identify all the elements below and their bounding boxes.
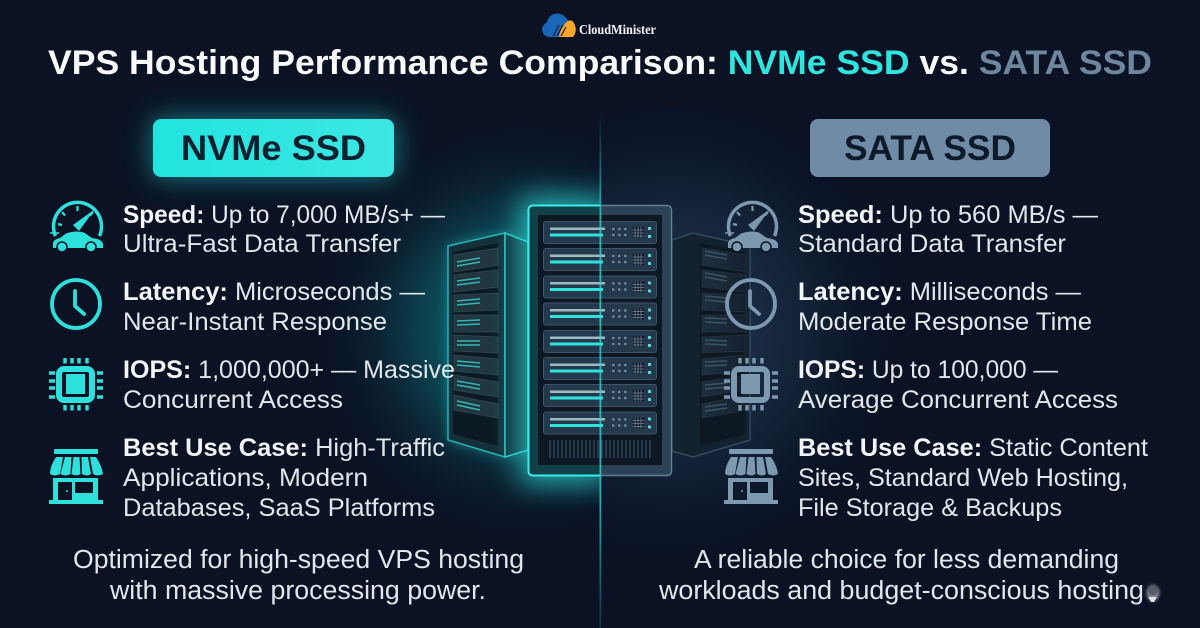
IOPS text: Average Concurrent Access bbox=[798, 386, 1118, 414]
SATA summary: A reliable choice for less demanding bbox=[694, 546, 1119, 574]
SATA summary bbox=[658, 546, 1144, 605]
icon: chip bbox=[724, 358, 778, 410]
right rear rack bbox=[672, 233, 750, 457]
logo icon bbox=[542, 14, 576, 37]
latency text: Near-Instant Response bbox=[123, 308, 387, 336]
latency text: Moderate Response Time bbox=[798, 308, 1092, 336]
title: VPS Hosting Performance Comparison: NVMe SSD vs. SATA SSD bbox=[48, 44, 1152, 82]
SATA summary: workloads and budget-conscious hosting bbox=[658, 577, 1144, 605]
server illustration bbox=[448, 197, 750, 484]
best use case text: Sites, Standard Web Hosting, bbox=[798, 464, 1128, 492]
SATA badge bbox=[810, 119, 1050, 177]
best use case text: Applications, Modern bbox=[123, 464, 368, 492]
latency text: Latency: Microseconds — bbox=[123, 278, 425, 306]
icon: speedometer and car bbox=[725, 202, 778, 252]
watermark smudge bbox=[1146, 585, 1160, 602]
NVMe badge bbox=[153, 119, 394, 177]
rack vent bbox=[550, 440, 650, 458]
best use case text bbox=[123, 434, 445, 522]
icon: clock bbox=[52, 280, 100, 328]
best use case text bbox=[798, 434, 1148, 522]
icon: storefront bbox=[49, 449, 103, 504]
speed text bbox=[123, 201, 445, 258]
IOPS text: IOPS: Up to 100,000 — bbox=[798, 356, 1058, 384]
NVMe summary bbox=[73, 546, 524, 605]
best use case text: Best Use Case: High-Traffic bbox=[123, 434, 445, 462]
latency text bbox=[798, 278, 1092, 336]
IOPS text: IOPS: 1,000,000+ — Massive bbox=[123, 356, 455, 384]
speed text: Speed: Up to 560 MB/s — bbox=[798, 201, 1098, 229]
NVMe summary: with massive processing power. bbox=[109, 577, 486, 605]
best use case text: File Storage & Backups bbox=[798, 494, 1062, 522]
latency text: Latency: Milliseconds — bbox=[798, 278, 1081, 306]
panel: SATA SSD bbox=[658, 119, 1160, 605]
latency text bbox=[123, 278, 425, 336]
central rack bbox=[528, 206, 672, 476]
icon: speedometer and car bbox=[50, 202, 103, 252]
panel: NVMe SSD bbox=[49, 119, 524, 605]
icon: chip bbox=[49, 358, 103, 410]
rack units bbox=[544, 222, 656, 434]
IOPS text: Concurrent Access bbox=[123, 386, 343, 414]
icon: storefront bbox=[724, 449, 778, 504]
NVMe badge: NVMe SSD bbox=[181, 129, 366, 168]
divider line bbox=[600, 115, 601, 628]
NVMe summary: Optimized for high-speed VPS hosting bbox=[73, 546, 524, 574]
left rear rack bbox=[448, 233, 528, 457]
best use case text: Best Use Case: Static Content bbox=[798, 434, 1148, 462]
IOPS text bbox=[123, 356, 455, 414]
IOPS text bbox=[798, 356, 1118, 414]
logo wordmark: CloudMinister bbox=[579, 23, 656, 38]
SATA badge: SATA SSD bbox=[844, 129, 1016, 168]
central rack glow bbox=[520, 197, 610, 484]
icon: clock bbox=[727, 280, 775, 328]
speed text: Standard Data Transfer bbox=[798, 230, 1066, 258]
speed text: Speed: Up to 7,000 MB/s+ — bbox=[123, 201, 445, 229]
speed text bbox=[798, 201, 1098, 258]
logo bbox=[542, 14, 656, 38]
speed text: Ultra-Fast Data Transfer bbox=[123, 230, 401, 258]
best use case text: Databases, SaaS Platforms bbox=[123, 494, 435, 522]
